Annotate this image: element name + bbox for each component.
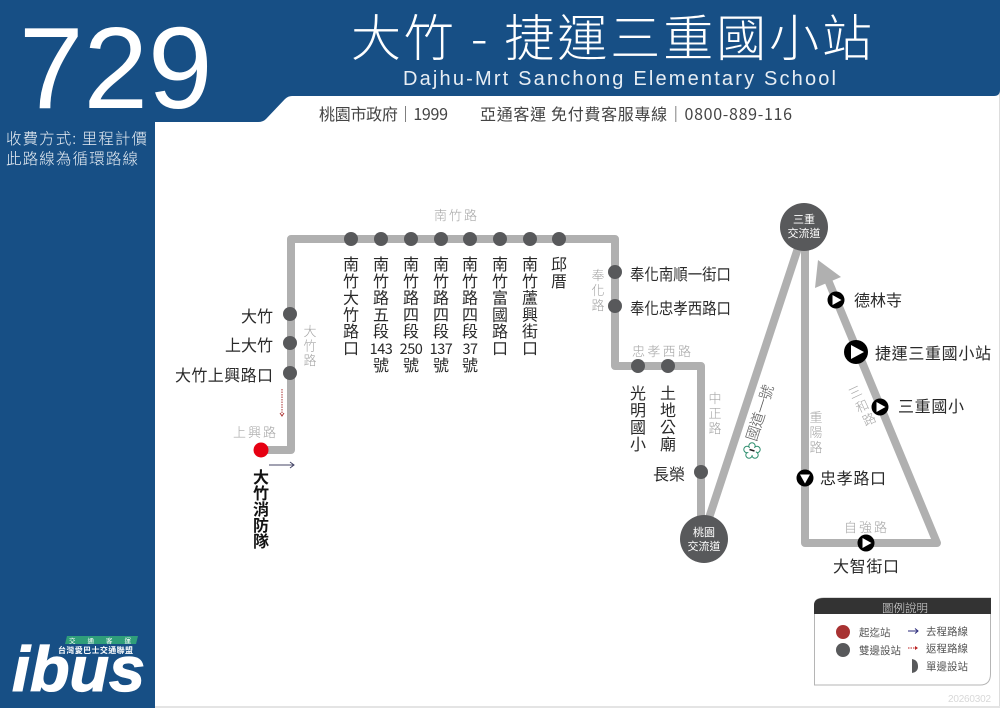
legend: 返程路線	[926, 641, 968, 656]
vertical stop labels: Nanzhu Road: 路	[403, 285, 419, 309]
one-way stops	[796, 292, 888, 552]
road names: 重	[809, 407, 823, 426]
start station label: 防	[253, 512, 269, 536]
right stop labels	[630, 261, 731, 485]
vertical stop labels: Nanzhu Road: 南	[373, 251, 389, 275]
loop stop labels: 大智街口	[833, 553, 899, 577]
road names: 路	[809, 437, 823, 456]
loop stop labels	[820, 287, 991, 577]
road names: 自強路	[844, 517, 887, 536]
loop stop labels: 德林寺	[854, 287, 902, 311]
interchange: Sanchong: 交流道	[788, 225, 820, 241]
right stop labels: 奉化忠孝西路口	[630, 295, 731, 319]
right stop labels: 奉化南順一街口	[630, 261, 731, 285]
legend: 起迄站	[859, 625, 891, 640]
legend: 圖例說明	[882, 600, 928, 616]
legend: 單邊設站	[926, 659, 968, 674]
vertical stop labels: Nanzhu Road: 竹	[403, 268, 419, 292]
vertical stop labels: Nanzhu Road: 公	[660, 414, 676, 438]
vertical stop labels: Nanzhu Road: 250	[400, 338, 423, 359]
vertical stop labels: Nanzhu Road: 段	[403, 318, 419, 342]
vertical stop labels: Nanzhu Road: 南	[462, 251, 478, 275]
vertical stop labels: Nanzhu Road: 富	[492, 285, 508, 309]
vertical stop labels: Nanzhu Road: 五	[373, 301, 389, 325]
direction arrows at start	[269, 389, 294, 468]
vertical stop labels: Nanzhu Road: 四	[403, 301, 419, 325]
interchange: Taoyuan: 交流道	[688, 538, 720, 554]
vertical stop labels: Nanzhu Road: 竹	[522, 268, 538, 292]
road names: 三	[845, 380, 865, 403]
contact line	[319, 101, 792, 125]
vertical stop labels: Nanzhu Road: 廟	[660, 431, 676, 455]
route number: 729	[19, 3, 213, 133]
vertical stop labels: Nanzhu Road: 明	[630, 397, 646, 421]
loop stop labels: 三重國小	[898, 393, 964, 417]
vertical stop labels: Nanzhu Road: 路	[433, 285, 449, 309]
vertical stop labels: Nanzhu Road	[343, 251, 676, 455]
logo: ibus: ibus	[12, 635, 145, 705]
vertical stop labels: Nanzhu Road: 段	[373, 318, 389, 342]
vertical stop labels: Nanzhu Road: 蘆	[522, 285, 538, 309]
vertical stop labels: Nanzhu Road: 四	[433, 301, 449, 325]
vertical stop labels: Nanzhu Road: 光	[630, 380, 646, 404]
contact line: 桃園市政府｜1999	[319, 101, 448, 125]
title: 大竹 - 捷運三重國小站	[351, 0, 872, 71]
vertical stop labels: Nanzhu Road: 路	[492, 318, 508, 342]
left stop labels: 上大竹	[225, 332, 273, 356]
vertical stop labels: Nanzhu Road: 竹	[462, 268, 478, 292]
vertical stop labels: Nanzhu Road: 號	[433, 352, 449, 376]
vertical stop labels: Nanzhu Road: 路	[373, 285, 389, 309]
vertical stop labels: Nanzhu Road: 143	[370, 338, 393, 359]
interchange: Taoyuan: 桃園	[693, 524, 715, 540]
route line: freeway	[707, 245, 799, 524]
start station label: 消	[253, 496, 269, 520]
vertical stop labels: Nanzhu Road: 口	[343, 335, 359, 359]
vertical stop labels: Nanzhu Road: 竹	[433, 268, 449, 292]
vertical stop labels: Nanzhu Road: 南	[343, 251, 359, 275]
road names: 上興路	[233, 422, 276, 441]
vertical stop labels: Nanzhu Road: 國	[630, 414, 646, 438]
road names: 南竹路	[434, 205, 477, 224]
start station label: 隊	[253, 528, 269, 552]
fare information: 此路線為循環路線	[6, 147, 138, 169]
vertical stop labels: Nanzhu Road: 四	[462, 301, 478, 325]
road names: 和	[852, 394, 872, 417]
vertical stop labels: Nanzhu Road: 號	[373, 352, 389, 376]
vertical stop labels: Nanzhu Road: 土	[660, 380, 676, 404]
road names: 路	[708, 418, 722, 437]
vertical stop labels: Nanzhu Road: 南	[433, 251, 449, 275]
start station label: 竹	[253, 480, 269, 504]
road names: 中	[708, 388, 722, 407]
start station label	[253, 464, 269, 552]
vertical stop labels: Nanzhu Road: 口	[492, 335, 508, 359]
loop stop labels: 忠孝路口	[820, 465, 886, 489]
date code: 20260302	[948, 694, 991, 705]
vertical stop labels: Nanzhu Road: 路	[462, 285, 478, 309]
road names: 奉	[591, 265, 605, 284]
interchange: Sanchong	[780, 203, 828, 251]
fare information: 收費方式: 里程計價	[6, 127, 147, 149]
start station	[254, 442, 268, 458]
road names: 路	[591, 295, 605, 314]
vertical stop labels: Nanzhu Road: 號	[403, 352, 419, 376]
vertical stop labels: Nanzhu Road: 南	[403, 251, 419, 275]
vertical stop labels: Nanzhu Road: 段	[433, 318, 449, 342]
vertical stop labels: Nanzhu Road: 地	[660, 397, 676, 421]
english title: Dajhu-Mrt Sanchong Elementary School	[403, 68, 836, 90]
road names: 化	[591, 280, 605, 299]
freeway name: 國道一號	[741, 382, 779, 444]
left stop labels: 大竹	[241, 303, 273, 327]
loop stop labels: 捷運三重國小站	[875, 340, 991, 364]
vertical stop labels: Nanzhu Road: 段	[462, 318, 478, 342]
vertical stop labels: Nanzhu Road: 37	[462, 338, 478, 359]
left stop labels	[175, 303, 273, 386]
vertical stop labels: Nanzhu Road: 137	[430, 338, 453, 359]
legend: 雙邊設站	[859, 643, 901, 658]
legend	[814, 598, 991, 685]
left stop labels: 大竹上興路口	[175, 362, 273, 386]
vertical stop labels: Nanzhu Road: 厝	[551, 268, 567, 292]
vertical stop labels: Nanzhu Road: 興	[522, 301, 538, 325]
icon: freeway plum blossom	[744, 443, 760, 458]
route line: main outbound	[261, 239, 701, 522]
road names	[233, 205, 887, 536]
road names: 陽	[809, 422, 823, 441]
vertical stop labels: Nanzhu Road: 竹	[373, 268, 389, 292]
road names: 路	[859, 407, 879, 430]
vertical stop labels: Nanzhu Road: 路	[343, 318, 359, 342]
vertical stop labels: Nanzhu Road: 號	[462, 352, 478, 376]
vertical stop labels: Nanzhu Road: 大	[343, 285, 359, 309]
road names: 正	[708, 403, 722, 422]
road names: 忠孝西路	[632, 341, 691, 360]
road names: 竹	[303, 336, 317, 354]
vertical stop labels: Nanzhu Road: 國	[492, 301, 508, 325]
start station label: 大	[253, 464, 269, 488]
right stop labels: 長榮	[653, 461, 685, 485]
logo: ibus: 台灣愛巴士交通聯盟	[58, 645, 133, 656]
stops	[283, 232, 708, 479]
road names: 大	[303, 321, 317, 340]
vertical stop labels: Nanzhu Road: 邱	[551, 251, 567, 275]
vertical stop labels: Nanzhu Road: 竹	[492, 268, 508, 292]
vertical stop labels: Nanzhu Road: 小	[630, 431, 646, 455]
vertical stop labels: Nanzhu Road: 竹	[343, 301, 359, 325]
loop arrowhead	[815, 260, 841, 288]
vertical stop labels: Nanzhu Road: 南	[522, 251, 538, 275]
vertical stop labels: Nanzhu Road: 口	[522, 335, 538, 359]
fare information	[6, 127, 147, 169]
interchange: Taoyuan	[680, 515, 728, 563]
vertical stop labels: Nanzhu Road: 南	[492, 251, 508, 275]
vertical stop labels: Nanzhu Road: 街	[522, 318, 538, 342]
interchange: Sanchong: 三重	[793, 211, 815, 227]
route line: Sanchong loop	[805, 245, 937, 543]
contact line: 亞通客運 免付費客服專線｜0800-889-116	[480, 101, 792, 125]
legend: 去程路線	[926, 624, 968, 639]
road names: 路	[303, 350, 317, 369]
vertical stop labels: Nanzhu Road: 竹	[343, 268, 359, 292]
logo: ibus: 交 通 客 運	[69, 635, 132, 645]
